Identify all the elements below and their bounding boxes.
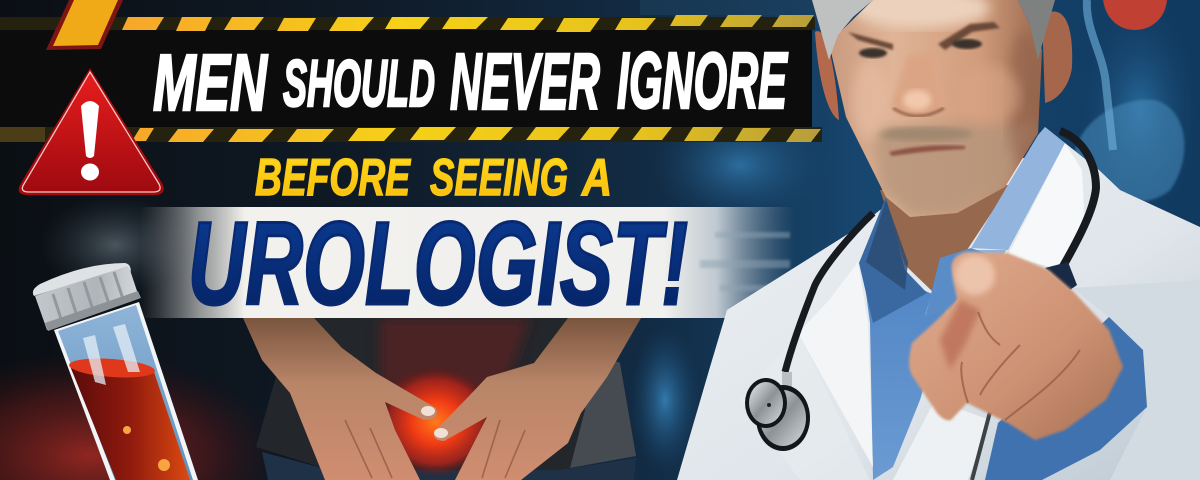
subtitle: SEEING [430,149,568,207]
hair [812,0,873,60]
eyebrows [848,32,893,50]
torso and hands [243,318,641,480]
subtitle: BEFORE [255,149,411,207]
shirt cuff [985,317,1147,480]
stethoscope tube left [785,213,873,372]
caution stripe middle [0,127,822,142]
title line one: MEN [153,38,268,127]
subtitle: A [580,149,612,207]
headline urologist: UROLOGIST! [188,198,688,330]
anatomy illustration: kidney and ureter [1075,0,1184,202]
tube cap [35,264,139,330]
title line one [153,36,788,127]
left coat lapel [798,262,873,467]
face [829,0,1042,217]
sign fragment top left [46,0,123,50]
right collar [925,127,1065,315]
dark shirt [256,318,636,470]
left collar [859,197,927,323]
caution stripe top [0,15,815,32]
title line one: SHOULD [283,46,435,120]
subtitle [255,149,612,207]
coat sleeve [1072,280,1200,480]
pointing fist [909,252,1123,440]
ear right [1042,12,1072,103]
left hand [243,318,437,480]
warning triangle [19,68,164,195]
glow [374,366,498,478]
doctor [677,0,1200,480]
stethoscope tube right [1060,131,1096,268]
eyes [859,48,887,58]
right coat lapel [1008,143,1085,270]
black title band [0,27,812,130]
ear left [815,31,839,120]
nose [892,52,944,116]
title line one: NEVER [450,37,600,126]
test tube [33,263,198,480]
stethoscope chest piece [745,372,810,451]
mouth [889,145,965,156]
lab coat [677,143,1200,480]
lower tube [972,412,990,480]
thumbnails [421,406,435,416]
blue shirt body [862,263,950,480]
title line one: IGNORE [617,36,788,125]
neck [880,185,1010,293]
right hand [434,318,641,480]
face shading [850,0,1043,217]
white brush band [140,207,795,318]
